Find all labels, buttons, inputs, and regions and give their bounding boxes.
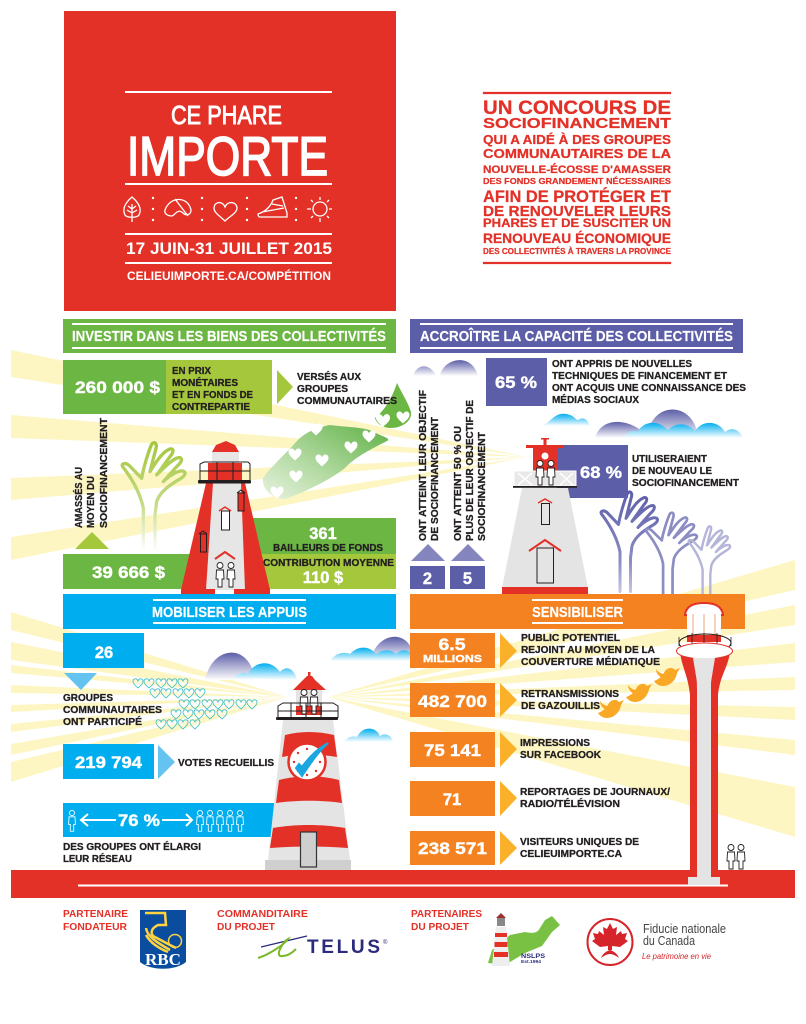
intro text block: DES FONDS GRANDEMENT NÉCESSAIRES: [483, 176, 671, 186]
intro text block: SOCIOFINANCEMENT: [483, 116, 671, 132]
lighthouse 1: [181, 441, 270, 594]
map of Nova Scotia with hearts: [263, 383, 411, 499]
intro text block: UN CONCOURS DE: [483, 98, 671, 119]
header: accroitre: ACCROÎTRE LA CAPACITÉ DES COLLECTIVITÉS: [420, 327, 733, 345]
stat: 482 700: [410, 683, 619, 717]
stat: 65 %: [486, 358, 746, 406]
vertical label: amasses: [72, 418, 110, 528]
intro text block: AFIN DE PROTÉGER ET: [483, 187, 672, 206]
label: groupes elargi: LEUR RÉSEAU: [63, 852, 132, 865]
date: 17 JUIN-31 JUILLET 2015: [126, 239, 332, 258]
intro text block: RENOUVEAU ÉCONOMIQUE: [483, 230, 671, 246]
stat: 238 571: [410, 831, 639, 865]
logo: Fiducie nationale du Canada: Fiducie nationale: [643, 922, 726, 936]
arrow down and label: groupes: [63, 673, 162, 728]
label: commanditaire: COMMANDITAIRE: [217, 908, 308, 920]
ground band: [11, 870, 795, 898]
intro text block: QUI A AIDÉ À DES GROUPES: [483, 132, 671, 147]
icon: purple hands: [601, 492, 730, 598]
stat: 39 666 $: [63, 554, 193, 589]
header: mobiliser: [63, 594, 396, 629]
arrow and label: verses aux groupes: GROUPES: [297, 384, 348, 395]
stat: 75 141: [410, 732, 602, 767]
clouds: top right: [542, 410, 743, 438]
logo: Fiducie nationale du Canada: [588, 919, 726, 965]
header: accroitre: [410, 319, 743, 353]
stat: 65 %: MÉDIAS SOCIAUX: [552, 393, 639, 406]
logo: RBC: RBC: [145, 950, 181, 969]
stat: 65 %: TECHNIQUES DE FINANCEMENT ET: [552, 371, 727, 382]
logo: NSLPS: Est.1994: [521, 959, 542, 964]
header: mobiliser: MOBILISER LES APPUIS: [152, 605, 307, 621]
vertical labels and stats: 2 and 5: DE SOCIOFINANCEMENT: [430, 417, 441, 541]
label: groupes elargi: [63, 840, 201, 865]
stat: 110 $ contribution: [250, 554, 396, 589]
lighthouse 3: [265, 672, 351, 870]
logo: NSLPS: [488, 913, 560, 966]
label: commanditaire: DU PROJET: [217, 921, 276, 933]
stat: 110 $ contribution: CONTRIBUTION MOYENNE: [263, 558, 394, 569]
stat: 482 700: RETRANSMISSIONS: [521, 689, 619, 700]
stat: 76 %: 76 %: [118, 812, 160, 830]
stat: 260 000 $: ET EN FONDS DE: [172, 390, 253, 401]
stat: 260 000 $: CONTREPARTIE: [172, 402, 250, 413]
label: partenaires: PARTENAIRES: [411, 908, 482, 920]
stat: 65 %: ONT ACQUIS UNE CONNAISSANCE DES: [552, 383, 746, 394]
intro text block: DE RENOUVELER LEURS: [483, 203, 671, 220]
stat: 6.5 millions: [410, 633, 660, 668]
stat: 6.5 millions: COUVERTURE MÉDIATIQUE: [521, 655, 660, 668]
stat: 71: RADIO/TÉLÉVISION: [520, 797, 620, 810]
stat: 260 000 $: [63, 360, 272, 414]
intro text block: [483, 92, 672, 264]
stat: 260 000 $: MONÉTAIRES: [172, 376, 238, 389]
lighthouse 4: [676, 603, 732, 885]
icon: twitter birds: [598, 668, 680, 718]
checkmark: [296, 743, 328, 776]
stat: 75 141: SUR FACEBOOK: [520, 750, 602, 761]
stat: 260 000 $: EN PRIX: [172, 366, 211, 377]
icon: green hand: [122, 443, 185, 552]
stat: 6.5 millions: MILLIONS: [423, 653, 482, 665]
arrow down and label: groupes: COMMUNAUTAIRES: [63, 705, 162, 716]
intro text block: DES COLLECTIVITÉS À TRAVERS LA PROVINCE: [483, 246, 671, 256]
label: partenaires: DU PROJET: [411, 921, 470, 933]
label: partenaire fondateur: FONDATEUR: [63, 921, 127, 933]
stat: 26: [63, 633, 144, 668]
logo: TELUS: ®: [383, 939, 388, 946]
stat: 6.5 millions: PUBLIC POTENTIEL: [521, 633, 620, 644]
stat: 68 %: [557, 445, 739, 498]
intro text block: NOUVELLE-ÉCOSSE D'AMASSER: [483, 163, 671, 176]
label: commanditaire: [217, 908, 308, 933]
stat: 71: [410, 781, 670, 816]
stat: 260 000 $: 260 000 $: [75, 379, 160, 397]
stat: 71: REPORTAGES DE JOURNAUX/: [520, 787, 670, 798]
vertical labels and stats: 2 and 5: SOCIOFINANCEMENT: [477, 432, 488, 541]
stat: 482 700: DE GAZOUILLIS: [521, 701, 600, 712]
arrow down and label: groupes: ONT PARTICIPÉ: [63, 715, 142, 728]
logo: RBC: [140, 910, 186, 969]
header: investir: INVESTIR DANS LES BIENS DES COLLECTIVITÉS: [72, 328, 386, 345]
arrow and label: verses aux groupes: [277, 370, 397, 407]
people beside lighthouse 4: [727, 844, 745, 869]
clouds: centre: [205, 637, 412, 742]
cloud: top left purple: [413, 360, 478, 376]
light rays background: [11, 350, 795, 837]
heading: importe: IMPORTE: [127, 125, 328, 187]
logo: TELUS: [258, 936, 388, 958]
stat: 65 %: ONT APPRIS DE NOUVELLES: [552, 359, 692, 370]
vertical labels and stats: 2 and 5: PLUS DE LEUR OBJECTIF DE: [465, 400, 476, 541]
arrow down and label: groupes: GROUPES: [63, 693, 113, 704]
stat: 6.5 millions: 6.5: [438, 636, 466, 654]
url: CELIEUIMPORTE.CA/COMPÉTITION: [127, 270, 331, 283]
vertical labels and stats: 2 and 5: [410, 390, 488, 589]
icon: sun: [307, 197, 332, 222]
stat: 68 %: SOCIOFINANCEMENT: [632, 478, 739, 489]
stat: 238 571: 238 571: [418, 840, 487, 858]
stat: 39 666 $: 39 666 $: [92, 564, 165, 582]
label: partenaires: [411, 908, 482, 933]
logo: TELUS: TELUS: [307, 937, 380, 958]
header: sensibiliser: SENSIBILISER: [532, 605, 623, 621]
header: sensibiliser: [410, 594, 745, 629]
icon row: [124, 197, 332, 222]
stat: 75 141: IMPRESSIONS: [520, 738, 590, 749]
vertical label: amasses: AMASSÉS AU: [72, 467, 85, 528]
stat: 361 bailleurs: [250, 518, 396, 554]
vertical labels and stats: 2 and 5: ONT ATTEINT LEUR OBJECTIF: [418, 390, 429, 541]
icon separators: [152, 197, 297, 221]
stat: 361 bailleurs: 361: [309, 525, 337, 543]
stat: 68 %: DE NOUVEAU LE: [632, 466, 712, 477]
stat: 65 %: 65 %: [495, 374, 537, 392]
stat: 238 571: VISITEURS UNIQUES DE: [520, 837, 639, 848]
arrow up: amasses: [75, 532, 109, 549]
stat: 71: 71: [443, 791, 461, 809]
clock: [288, 744, 326, 780]
logo: Fiducie nationale du Canada: du Canada: [643, 934, 695, 948]
header: investir: [63, 319, 396, 353]
stat: 219 794: 219 794: [75, 754, 143, 772]
stat: 68 %: UTILISERAIENT: [632, 454, 707, 465]
vertical labels and stats: 2 and 5: ONT ATTEINT 50 % OU: [453, 426, 464, 541]
heading: ce phare: CE PHARE: [171, 100, 282, 130]
label: partenaire fondateur: PARTENAIRE: [63, 908, 128, 920]
stat: 68 %: 68 %: [580, 464, 622, 482]
stat: 75 141: 75 141: [424, 742, 481, 760]
intro text block: PHARES ET DE SUSCITER UN: [483, 218, 671, 230]
icon: shoe: [258, 197, 287, 217]
stat: 26: 26: [95, 644, 113, 662]
vertical labels and stats: 2 and 5: 5: [463, 570, 472, 588]
label: partenaire fondateur: [63, 908, 128, 933]
stat: 238 571: CELIEUIMPORTE.CA: [520, 849, 622, 860]
stat: 76 %: [63, 803, 278, 837]
vertical labels and stats: 2 and 5: 2: [423, 570, 432, 588]
stat: 482 700: 482 700: [418, 693, 487, 711]
logo: NSLPS: NSLPS: [521, 953, 546, 960]
logo: Fiducie nationale du Canada: Le patrimoine en vie: [642, 952, 712, 961]
stat: 110 $ contribution: 110 $: [303, 569, 343, 587]
arrow and label: verses aux groupes: COMMUNAUTAIRES: [297, 396, 397, 407]
vertical label: amasses: MOYEN DU: [86, 476, 97, 528]
stat: 219 794: [63, 744, 274, 779]
icon: heart: [214, 203, 237, 221]
hearts pattern: [133, 679, 257, 729]
icon: palette: [165, 199, 191, 216]
stat: 6.5 millions: REJOINT AU MOYEN DE LA: [521, 645, 655, 656]
intro text block: COMMUNAUTAIRES DE LA: [483, 147, 671, 161]
title panel: [64, 11, 396, 311]
label: groupes elargi: DES GROUPES ONT ÉLARGI: [63, 840, 201, 853]
icon: leaf: [124, 197, 140, 222]
stat: 361 bailleurs: BAILLEURS DE FONDS: [273, 543, 383, 554]
vertical label: amasses: SOCIOFINANCEMENT: [99, 418, 110, 528]
lighthouse 2: [502, 438, 588, 594]
arrow and label: verses aux groupes: VERSÉS AUX: [297, 370, 361, 383]
stat: 219 794: VOTES RECUEILLIS: [178, 758, 274, 769]
